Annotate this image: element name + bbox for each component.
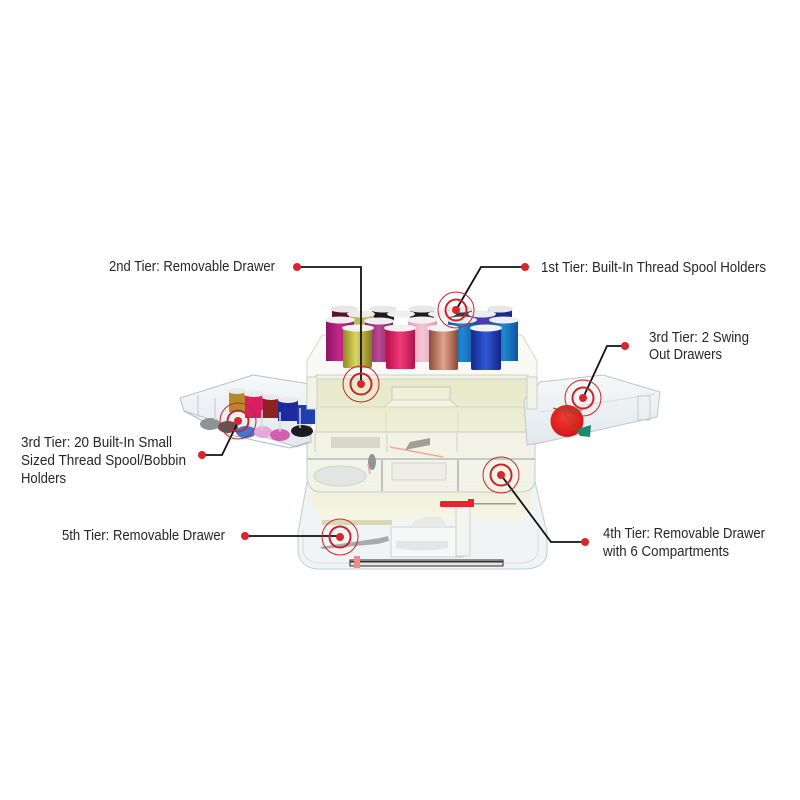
front row: [342, 324, 502, 370]
2nd and 3rd tier drawer body: [316, 378, 530, 456]
back row: [330, 306, 513, 323]
callout: 2nd tier: 2nd Tier: Removable Drawer: [109, 258, 275, 275]
icon: tomato pincushion: [550, 405, 591, 437]
callout: 3rd tier small spool holders: 3rd Tier: 20 Built-In Small: [21, 434, 172, 451]
callout: 4th tier: 4th Tier: Removable Drawer: [603, 525, 765, 542]
top tray holding large spools: [307, 335, 537, 409]
callout: 4th tier: [483, 457, 765, 560]
callout: 3rd tier small spool holders: [21, 403, 256, 487]
second row: [325, 316, 519, 362]
small spools: [198, 388, 315, 441]
callout: 3rd tier swing out drawers: [565, 329, 749, 416]
4th tier compartment drawer: [307, 432, 535, 492]
organizer product illustration: [180, 306, 660, 569]
large thread spools: [325, 306, 519, 370]
callout: 5th tier: [62, 519, 358, 555]
callout: 3rd tier swing out drawers: 3rd Tier: 2 Swing: [649, 329, 749, 346]
callout: 4th tier: with 6 Compartments: [602, 543, 729, 560]
5th tier drawer body: [298, 482, 547, 569]
right swing-out tray with pincushion: [524, 375, 660, 445]
third row: [347, 310, 496, 327]
callout: 3rd tier small spool holders: Holders: [21, 470, 66, 487]
callout: 3rd tier swing out drawers: Out Drawers: [649, 346, 722, 363]
callout: 1st tier: 1st Tier: Built-In Thread Spool Holders: [541, 259, 766, 276]
callout: 5th tier: 5th Tier: Removable Drawer: [62, 527, 225, 544]
callout: 1st tier: [438, 259, 766, 328]
callout: 2nd tier: [109, 258, 379, 402]
left swing-out tray with small spools: [180, 375, 315, 448]
callout: 3rd tier small spool holders: Sized Thread Spool/Bobbin: [21, 452, 186, 469]
